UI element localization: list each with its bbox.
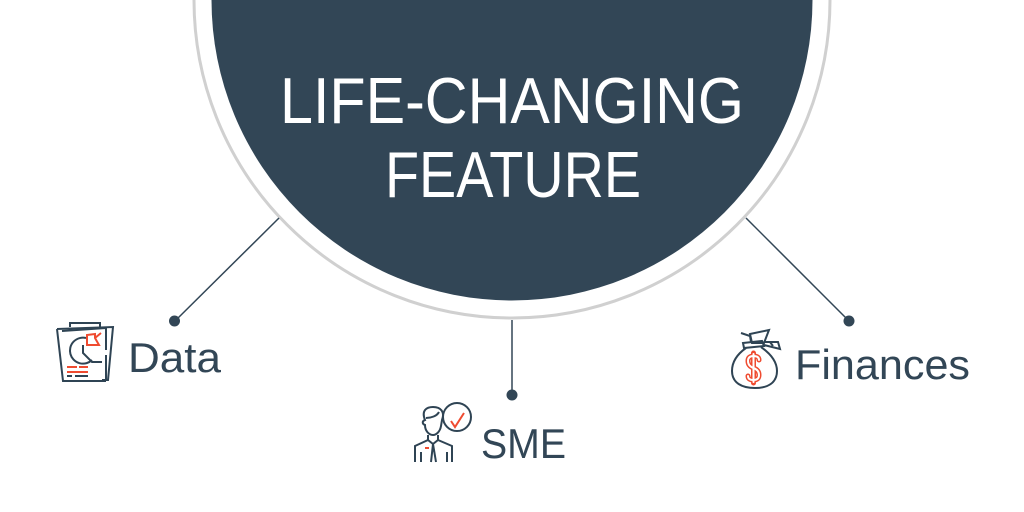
icon: SME person — [415, 403, 471, 462]
connector: finances — [746, 218, 854, 326]
title: FEATURE — [385, 138, 641, 211]
connector: data — [169, 218, 279, 326]
icon: money bag — [732, 330, 780, 388]
outer ring — [194, 0, 830, 318]
icon: data report — [57, 323, 113, 381]
connector: SME — [506, 320, 518, 400]
label: Finances: Finances — [795, 341, 970, 388]
title — [280, 64, 744, 211]
central dark semicircle — [212, 0, 812, 300]
label: Data: Data — [128, 334, 222, 381]
label: SME: SME — [481, 420, 566, 467]
title: LIFE-CHANGING — [280, 64, 744, 137]
